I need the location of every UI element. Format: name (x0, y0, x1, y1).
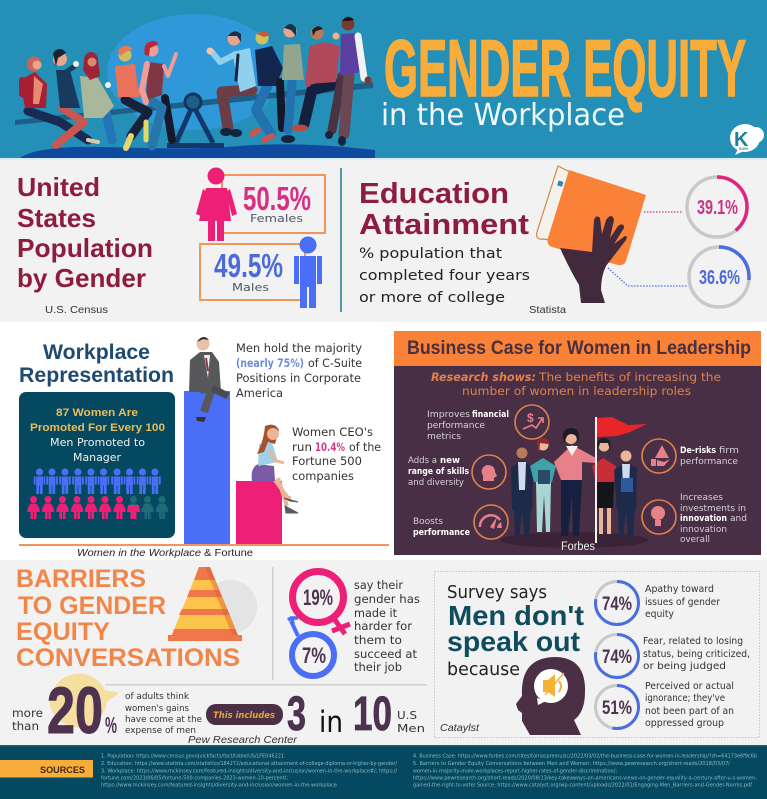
text: women CEO stat: 10.4% (315, 440, 345, 454)
text: men C-suite stat: Men hold the majority (236, 341, 362, 355)
text: education description: or more of college (359, 290, 505, 306)
chart: 36.6% ring (689, 247, 749, 307)
item: innovation: overall (680, 535, 710, 545)
panel: population and education (0, 160, 767, 322)
woman red (592, 438, 616, 534)
panel: promotion stat: Promoted For Every 100 (30, 422, 165, 434)
text: sources left column: 2. Education: https://www.statista.com/statistics/184272/educational-attainment-of-college-diploma-or-higher-by-gender/ (101, 761, 397, 767)
heading: barriers: EQUITY (16, 618, 110, 646)
text: sources right column: https://www.pewresearch.org/short-reads/2020/08/13/key-takeaways-on-americans-views-on-gender-equality-a-century-after-u-s-women- (413, 776, 757, 782)
heading: Education Attainment (359, 178, 529, 241)
item: boosts performance (413, 505, 508, 539)
person 3 (80, 52, 114, 140)
text: gender harder to succeed: gender has (354, 592, 420, 606)
text: gender harder to succeed: succeed at (354, 647, 417, 661)
text: sources right column: 5. Barriers to Gender Equity Conversations between Men and Women: https://www.pewresearch.org/short-reads/2018/03/07/ (413, 761, 730, 767)
heading: men don't speak out: Survey says (447, 582, 547, 603)
text: gender harder to succeed: harder for (354, 619, 412, 633)
person 7 (252, 31, 283, 140)
heading: barriers: BARRIERS (16, 565, 146, 593)
item: innovation: investments in (680, 504, 746, 514)
heading: Workplace Representation: Representation (19, 364, 174, 387)
source: Women in the Workplace & Fortune: Women in the Workplace (77, 547, 201, 559)
chart: gender symbols 19% and 7%: 19% (303, 585, 333, 610)
item: financial performance: financial (472, 410, 509, 420)
heading: Workplace Representation (19, 341, 174, 387)
panel: sources footer (0, 745, 767, 799)
panel: promotion stat: 87 Women Are (56, 407, 138, 419)
text: education description: completed four years (359, 268, 530, 284)
item: financial performance: Improves (427, 410, 471, 420)
chart: apathy 74%: 74% (602, 594, 632, 615)
chart: apathy 74%: issues of gender (645, 597, 720, 608)
person 6 (206, 31, 256, 137)
illustration: seated man (189, 337, 228, 422)
text: sources left column: fortune.com/2023/06/05/fortune-500-companies-2023-women-10-percent/; (101, 776, 288, 782)
heading: United States Population by Gender: United (17, 172, 100, 202)
chart: apathy 74%: Apathy toward (645, 584, 714, 595)
text: adults think: expense of men (125, 726, 196, 736)
chart: apathy 74% (596, 582, 720, 624)
chart: 39.1% ring: 39.1% (697, 197, 738, 219)
chart: ignorance 51%: ignorance; they've (645, 693, 725, 704)
icons: ten men (34, 468, 161, 494)
stat: females 50.5% (196, 168, 325, 241)
chart: ignorance 51% (596, 681, 734, 729)
text: sources left column: 3. Workplace: https://www.mckinsey.com/featured-insights/diversity-and-inclusion/women-in-the-workplace#/; https:// (101, 768, 397, 774)
stat: 3 in 10 US men: 10 (353, 688, 392, 741)
icon: KORI logo (730, 124, 764, 155)
chart: 39.1% ring (687, 177, 747, 237)
text: men C-suite stat: Positions in Corporate (236, 371, 361, 385)
panel: workplace representation (19, 337, 389, 559)
chart: ignorance 51%: Perceived or actual (645, 681, 734, 692)
icon: head with muted speaker (516, 657, 585, 735)
panel: promotion stat: Men Promoted to (50, 437, 145, 449)
text: sources left column (101, 754, 397, 788)
man left (511, 448, 533, 538)
item: innovation: and (730, 514, 747, 524)
person 2 (53, 49, 84, 145)
text: research shows: Research shows: (431, 370, 536, 384)
text: research shows (431, 370, 721, 398)
item: new range of skills: and diversity (408, 478, 464, 488)
stat: 3 in 10 US men: U.S (397, 710, 417, 722)
text: women CEO stat: Women CEO's (292, 425, 373, 439)
item: de-risks (642, 439, 739, 473)
chart: fear 74%: Fear, related to losing (643, 636, 743, 647)
title: in the Workplace (381, 98, 625, 133)
text: gender harder to succeed (354, 578, 420, 674)
stat: 3 in 10 US men: Men (397, 723, 425, 735)
stat: females 50.5%: Females (250, 212, 303, 225)
item: new range of skills: range of skills (408, 467, 469, 477)
text: men C-suite stat (236, 341, 362, 400)
text: sources left column: https://www.mckinsey.com/featured-insights/diversity-and-inclusion/women-in-the-workplace (101, 782, 337, 788)
text: sources right column: gained-the-right-to-vote/ Source: https://www.catalyst.org/wp-content/uploads/2022/01/Engaging-Men_Barriers-and-Gender-Norms.pdf (413, 782, 752, 788)
source: Statista: Statista (529, 304, 566, 316)
item: de-risks: De-risks (680, 446, 716, 456)
chart: gender symbols 19% and 7% (288, 572, 350, 676)
item: new range of skills (408, 455, 506, 489)
icons: women promoted (27, 496, 168, 519)
chart: ignorance 51%: oppressed group (645, 718, 724, 729)
heading: men don't speak out (447, 582, 584, 680)
person 4 (115, 46, 148, 148)
text: gender harder to succeed: made it (354, 606, 397, 620)
panel: business case for women in leadership (394, 331, 761, 555)
text: sources right column: 4. Business Case: https://www.forbes.com/sites/tomaspremuzic/2022/03/02/the-business-case-for-women-in-leadership/?sh=64173e6f9c6b (413, 754, 757, 760)
stat: more than 20% (12, 673, 119, 747)
item: financial performance: performance (427, 421, 485, 431)
item: innovation: Increases (680, 493, 724, 503)
stat: 3 in 10 US men (287, 688, 425, 741)
icon: traffic cone (168, 567, 257, 641)
text: gender harder to succeed: their job (354, 660, 402, 674)
stat: 3 in 10 US men: in (319, 705, 343, 739)
text: adults think (125, 692, 202, 736)
heading: men don't speak out: because (447, 659, 520, 680)
source: Women in the Workplace & Fortune: & Fortune (204, 547, 253, 559)
text: men C-suite stat: (nearly 75%) (236, 356, 304, 370)
source: Forbes: Forbes (561, 541, 595, 553)
source: Women in the Workplace & Fortune (77, 547, 253, 559)
heading: Education Attainment: Education (359, 178, 509, 210)
source: Pew Research Center: Pew Research Center (188, 734, 298, 746)
text: men C-suite stat: of C-Suite (308, 356, 362, 370)
text: adults think: of adults think (125, 692, 189, 702)
item: financial performance (427, 405, 549, 442)
chart: fear 74%: 74% (602, 647, 632, 668)
stat: females 50.5%: 50.5% (243, 180, 311, 217)
heading: Workplace Representation: Workplace (43, 341, 150, 364)
panel: promotion stat (19, 392, 175, 538)
text: research shows: The benefits of increasing the (538, 370, 721, 384)
source: Catalyst: Cataylst (440, 722, 480, 734)
text: women CEO stat: Fortune 500 (292, 454, 362, 468)
text: women CEO stat (292, 425, 381, 483)
heading: Education Attainment: Attainment (359, 209, 529, 241)
callout: this includes: This includes (213, 711, 276, 721)
chart: ignorance 51%: 51% (602, 698, 632, 719)
chart: 36.6% ring: 36.6% (699, 267, 740, 289)
text: men C-suite stat: America (236, 386, 283, 400)
label: sources (0, 760, 93, 778)
icon: KORI logo: KORI (739, 147, 748, 151)
chart: apathy 74%: equity (645, 609, 674, 620)
chart: fear 74%: status, being criticized, (643, 649, 750, 660)
heading: men don't speak out: Men don't (448, 600, 584, 631)
bar: women (236, 481, 282, 544)
item: boosts performance: Boosts (413, 517, 444, 527)
panel: promotion stat: Manager (73, 452, 122, 464)
person 5 (142, 41, 176, 146)
chart: fear 74%: or being judged (643, 661, 726, 672)
chart: ignorance 51%: not been part of an (645, 706, 734, 717)
text: sources left column: 1. Population: https://www.census.gov/quickfacts/fact/table/US/LFE046221 (101, 754, 284, 760)
stat: more than 20%: more (12, 706, 43, 720)
illustration: leadership team (500, 417, 648, 548)
chart: gender symbols 19% and 7%: 7% (302, 643, 326, 668)
text: adults think: women's gains (125, 704, 190, 714)
heading: United States Population by Gender: States (17, 203, 96, 233)
text: women CEO stat: companies (292, 469, 354, 483)
text: education description (359, 246, 530, 306)
item: new range of skills: Adds a (408, 456, 437, 466)
person 10 (325, 17, 372, 146)
woman center (554, 428, 596, 536)
item: new range of skills: new (440, 456, 460, 466)
text: adults think: have come at the (125, 715, 202, 725)
text: sources right column: women-in-majority-male-workplaces-report-higher-rates-of-gender-discrimination/; (413, 768, 617, 774)
text: gender harder to succeed: say their (354, 578, 403, 592)
bar: men (184, 391, 230, 544)
stat: more than 20%: % (105, 712, 117, 738)
person 1 (20, 56, 98, 142)
man right (614, 450, 637, 538)
panel: header banner (0, 0, 767, 160)
person 9 (292, 26, 340, 131)
stat: 3 in 10 US men: 3 (287, 688, 306, 741)
text: education description: % population that (359, 246, 502, 262)
panel: survey says (434, 572, 760, 738)
icon: hand holding book (537, 166, 646, 303)
icon: flag (595, 417, 647, 543)
illustration: people on a seesaw (15, 14, 375, 158)
text: gender harder to succeed: them to (354, 633, 402, 647)
icon: KORI logo: K (734, 129, 749, 151)
item: innovation: innovation (680, 514, 727, 524)
heading: barriers: TO GENDER (18, 592, 166, 620)
woman teal (530, 438, 556, 532)
item: de-risks: firm (719, 446, 739, 456)
text: women CEO stat: run (292, 440, 312, 454)
text: women CEO stat: of the (349, 440, 381, 454)
stat: males 49.5%: Males (232, 281, 269, 294)
source: U.S. Census: U.S. Census (45, 304, 108, 316)
chart: fear 74% (596, 634, 750, 678)
item: boosts performance: performance (413, 528, 470, 538)
callout: this includes (206, 704, 283, 725)
panel: barriers to gender equity conversations (0, 560, 767, 747)
stat: males 49.5%: 49.5% (214, 247, 283, 284)
heading: barriers (16, 565, 240, 672)
text: research shows: number of women in leadership roles (462, 384, 691, 398)
stat: males 49.5% (200, 236, 322, 308)
stat: more than 20%: 20 (47, 673, 103, 747)
item: financial performance: metrics (427, 432, 462, 442)
heading: United States Population by Gender: by Gender (17, 263, 146, 293)
item: innovation: innovation (680, 525, 727, 535)
heading: men don't speak out: speak out (447, 626, 580, 657)
heading: United States Population by Gender: Population (17, 233, 153, 263)
illustration: seated woman (252, 425, 298, 513)
item: de-risks: performance (680, 457, 738, 467)
person 8 (280, 24, 304, 143)
heading: United States Population by Gender (17, 172, 153, 293)
text: sources right column (413, 754, 757, 788)
item: financial performance: $ (527, 411, 534, 425)
heading: barriers: CONVERSATIONS (16, 644, 240, 672)
label: sources: SOURCES (40, 765, 85, 775)
item: innovation (642, 493, 747, 545)
stat: more than 20%: than (12, 719, 39, 733)
